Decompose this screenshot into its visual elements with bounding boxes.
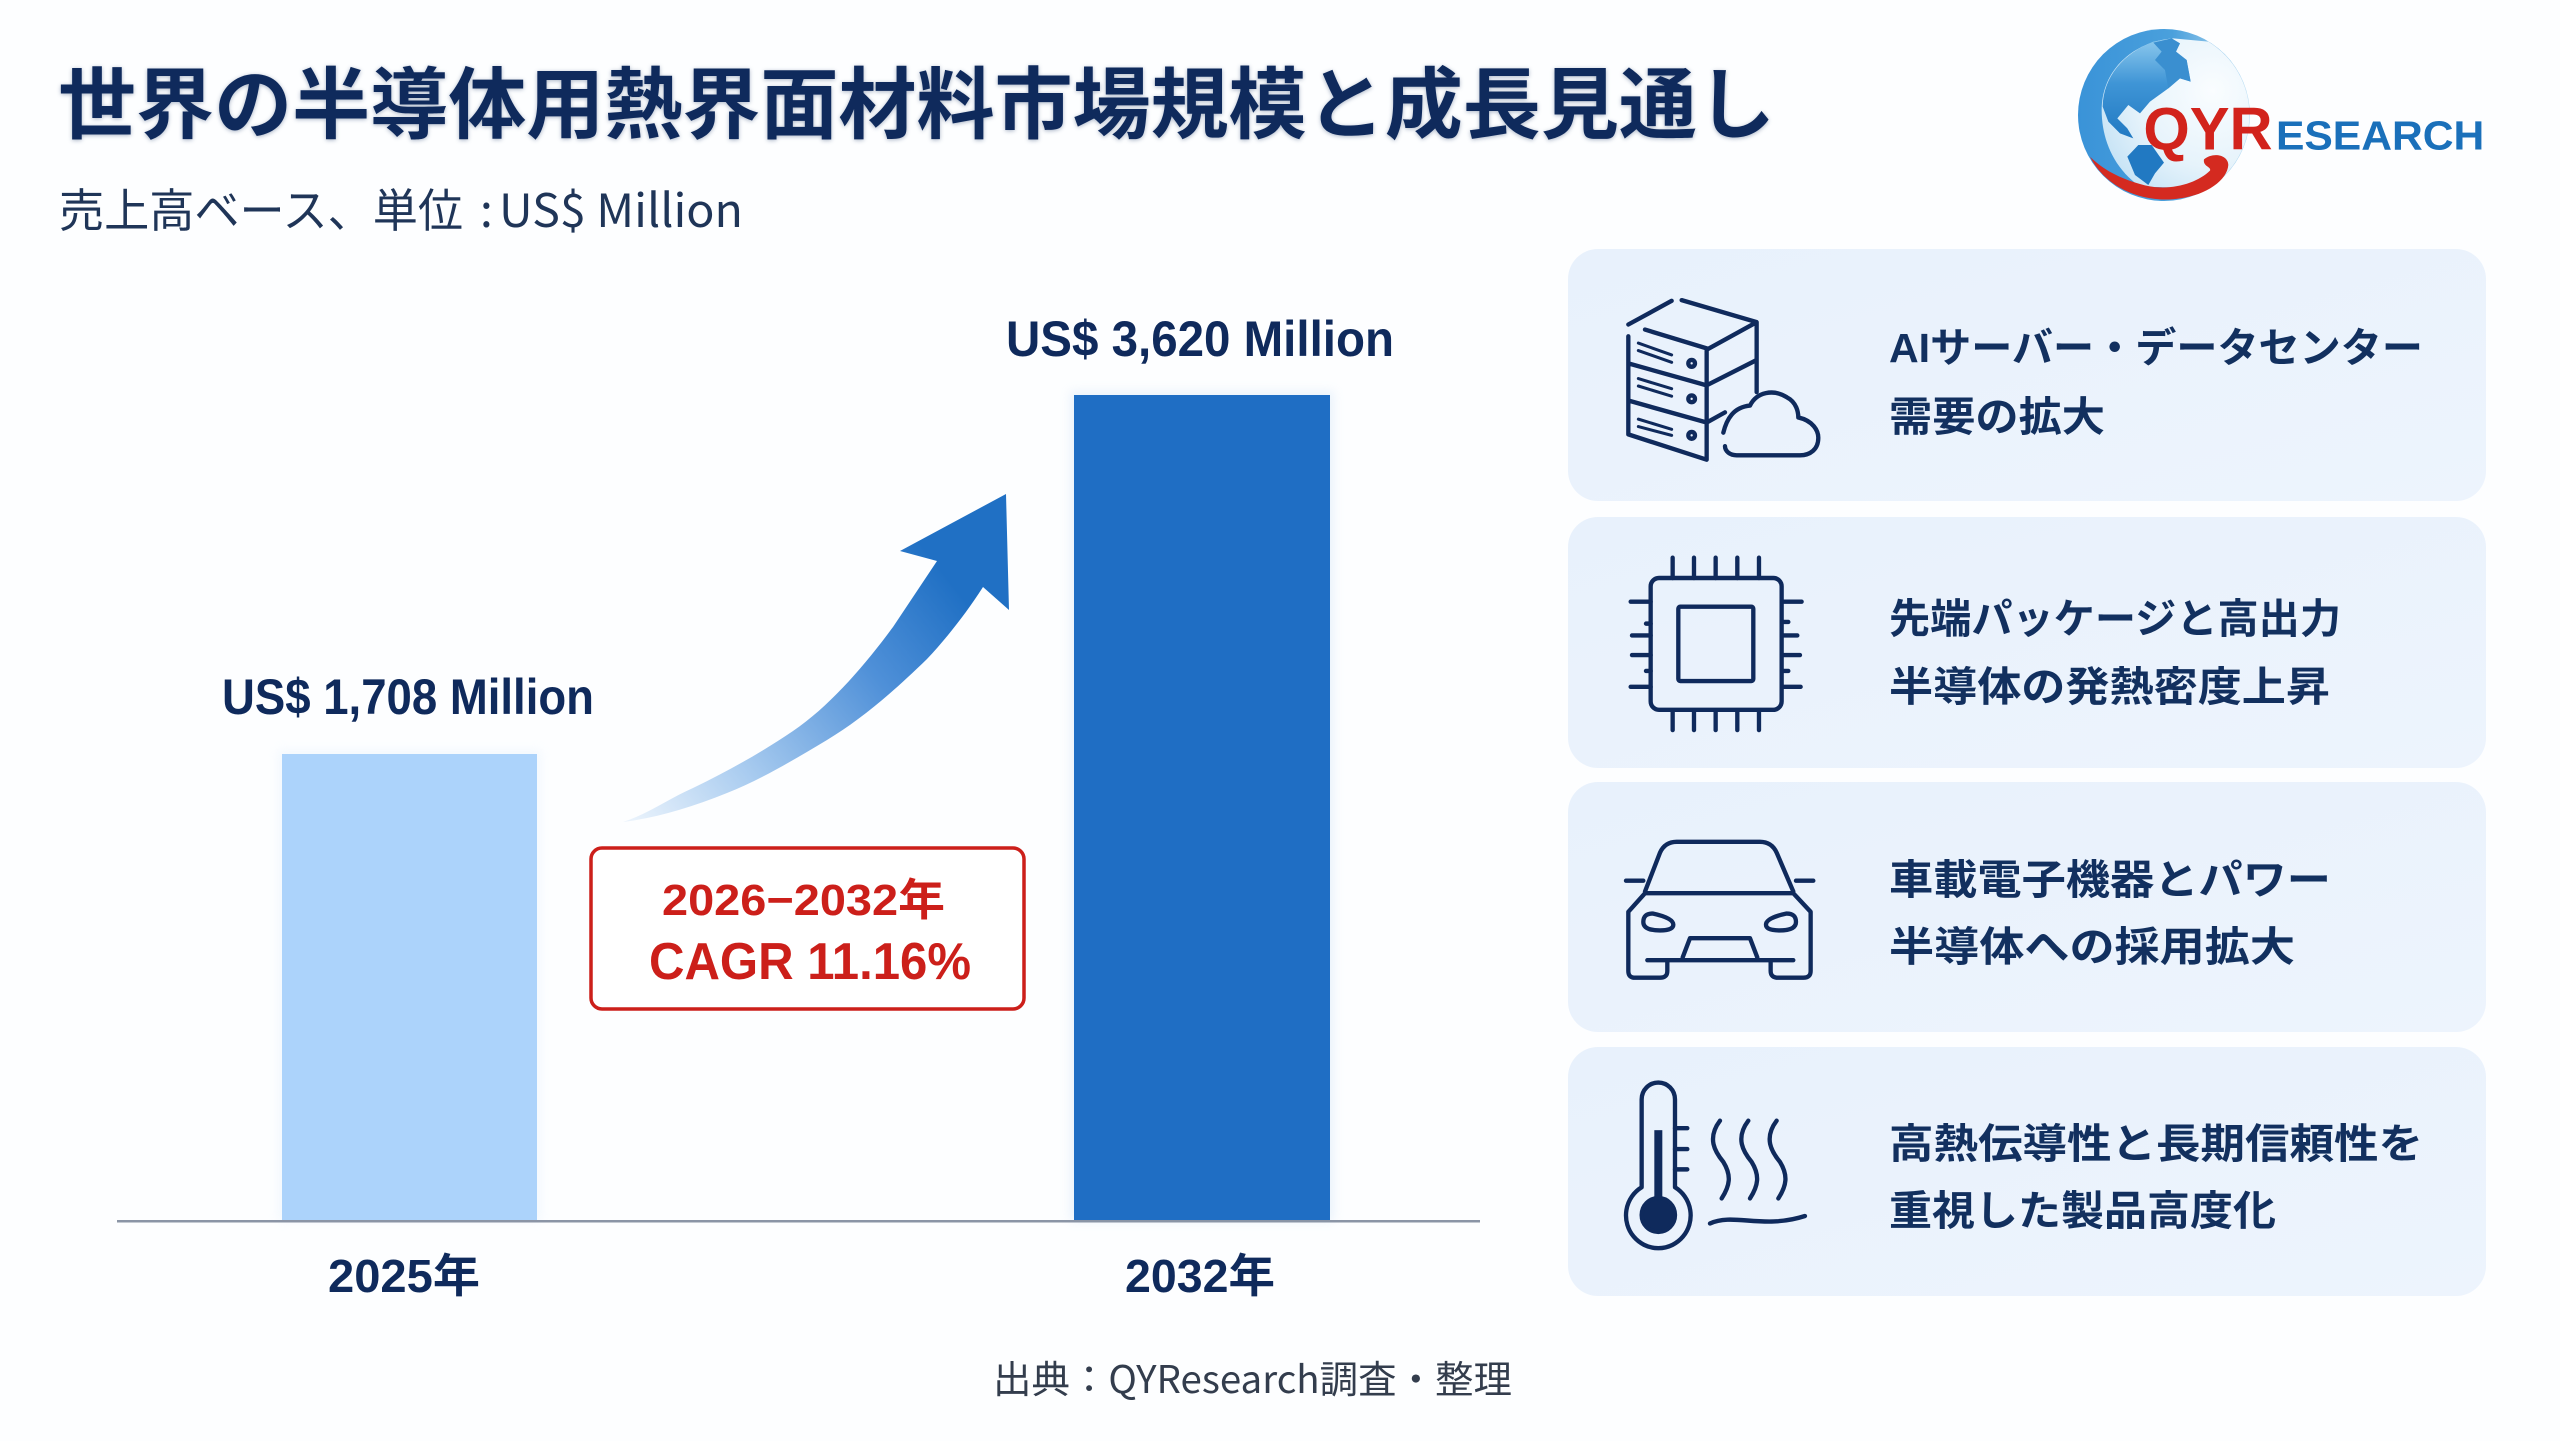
bar chart <box>117 311 1480 1302</box>
axis label 2025: 2025年 <box>328 1250 480 1302</box>
panel: thermal performance <box>1568 1047 2486 1296</box>
bar: 2032 <box>1074 395 1330 1221</box>
icon: car <box>1626 842 1813 978</box>
icon: server and cloud <box>1628 300 1818 460</box>
logo wordmark ESEARCH: ESEARCH <box>2276 112 2484 158</box>
subtitle: 売上高ベース、単位 <box>59 175 463 241</box>
card text line 2: 半導体への採用拡大 <box>1889 924 2295 970</box>
title: 世界の半導体用熱界面材料市場規模と成長見通し <box>58 61 1775 149</box>
panel: automotive <box>1568 782 2486 1032</box>
axis label 2032: 2032年 <box>1125 1250 1275 1302</box>
source note: 出典：QYResearch調査・整理 <box>993 1349 1512 1404</box>
card text line 2: 重視した製品高度化 <box>1889 1188 2276 1234</box>
icon: chip <box>1631 558 1802 730</box>
panel: AI servers <box>1568 249 2486 501</box>
card background <box>1568 517 2486 768</box>
value label 2025: US$ 1,708 Million <box>222 669 594 725</box>
callout period: 2026−2032年 <box>662 876 945 925</box>
card background <box>1568 249 2486 501</box>
icon: thermometer and heat <box>1626 1083 1805 1248</box>
callout rate: CAGR 11.16% <box>649 933 971 991</box>
subtitle <box>59 175 743 241</box>
card text: 車載電子機器とパワー <box>1889 857 2331 903</box>
value label 2032: US$ 3,620 Million <box>1006 311 1394 367</box>
card text line 2: 半導体の発熱密度上昇 <box>1889 664 2330 710</box>
card background <box>1568 782 2486 1032</box>
axis line <box>117 1220 1480 1222</box>
card background <box>1568 1047 2486 1296</box>
card text line 2: 需要の拡大 <box>1889 394 2105 440</box>
bar glow <box>278 391 1334 1221</box>
card text: 先端パッケージと高出力 <box>1889 596 2341 642</box>
panel: advanced packaging <box>1568 517 2486 768</box>
bar: 2025 <box>282 754 537 1221</box>
growth arrow <box>623 494 1009 822</box>
callout box <box>591 848 1024 1009</box>
card text: AIサーバー・データセンター <box>1889 325 2423 371</box>
subtitle: US$ Million <box>499 175 743 241</box>
callout: CAGR <box>591 848 1024 1009</box>
subtitle: : <box>480 175 493 241</box>
logo: QYResearch <box>2078 29 2484 201</box>
logo wordmark QYR: QYR <box>2143 95 2273 162</box>
logo swoosh <box>2090 155 2228 200</box>
card text: 高熱伝導性と長期信頼性を <box>1889 1121 2423 1167</box>
logo globe <box>2078 29 2250 201</box>
